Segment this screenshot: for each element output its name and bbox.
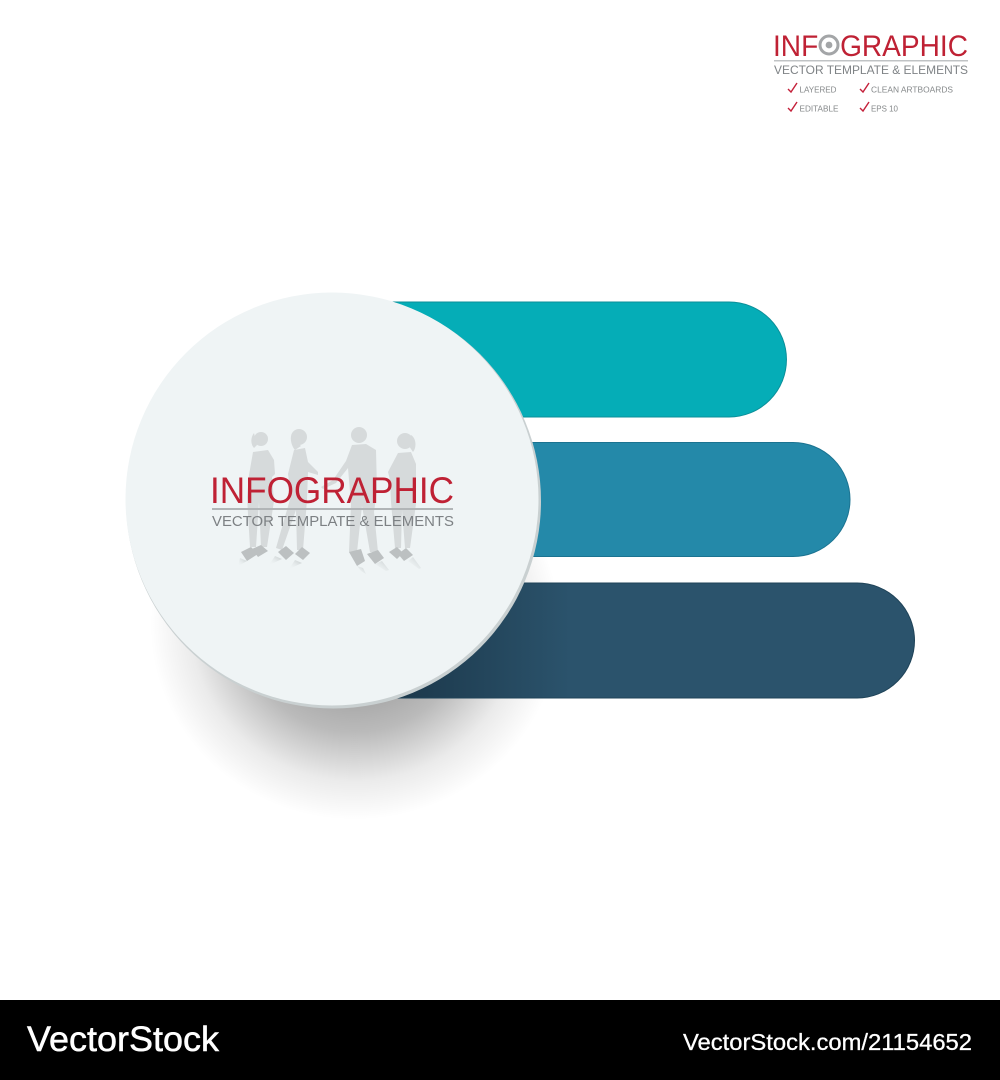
person 3	[321, 427, 389, 574]
checklist: EDITABLE	[800, 104, 839, 114]
logo subtitle: VECTOR TEMPLATE & ELEMENTS	[774, 63, 968, 77]
bar: navy	[380, 583, 914, 698]
center subtitle: VECTOR TEMPLATE & ELEMENTS	[212, 513, 454, 530]
footer image id: VectorStock.com/21154652	[683, 1029, 972, 1055]
silhouettes: business people	[238, 427, 421, 574]
checklist: EPS 10	[871, 104, 898, 114]
circle face	[126, 292, 538, 706]
drop shadow under circle	[150, 430, 560, 820]
checklist: CLEAN ARTBOARDS	[871, 84, 953, 94]
checklist	[788, 83, 953, 114]
person 4	[388, 433, 421, 569]
logo wordmark: INFOGRAPHIC	[773, 30, 968, 63]
person 2	[269, 429, 318, 569]
circle panel	[126, 292, 541, 708]
person 1	[238, 432, 275, 566]
icon: target letter O	[820, 36, 838, 54]
checklist: LAYERED	[800, 84, 836, 94]
footer bar	[0, 1000, 1000, 1080]
footer brand: VectorStock	[27, 1020, 220, 1059]
logo: infographic template badge	[773, 30, 968, 114]
bar: teal	[380, 302, 786, 417]
bar: blue	[480, 442, 850, 556]
center title: INFOGRAPHIC	[210, 470, 454, 511]
circle rim	[126, 294, 541, 708]
